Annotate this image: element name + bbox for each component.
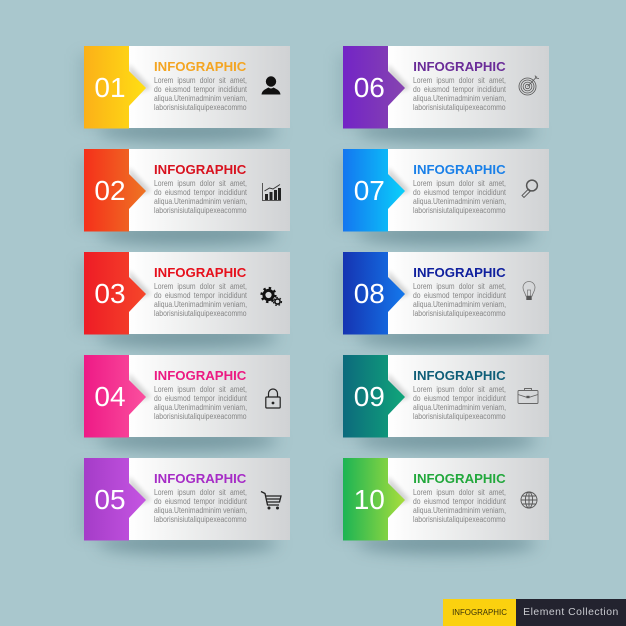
card 09 (336, 355, 549, 458)
heading 05: INFOGRAPHIC (154, 471, 246, 486)
card 07 (336, 149, 549, 252)
number tab 08 (343, 252, 410, 334)
text block 04: aliqua.Utenimadminim veniam, (154, 402, 247, 412)
text block 01 (154, 76, 247, 112)
text block 08 (413, 282, 506, 318)
number tab 03 (84, 252, 151, 334)
icon: gears (260, 286, 282, 306)
card 06 (336, 46, 549, 149)
number tab 09 (343, 355, 410, 438)
text block 04: Lorem ipsum dolor sit amet, (154, 384, 247, 394)
text block 04 (154, 384, 247, 420)
number 03: 03 (94, 278, 126, 308)
number 07: 07 (354, 174, 385, 206)
icon: target (518, 75, 539, 96)
text block 03 (154, 282, 247, 318)
number 05: 05 (94, 484, 126, 514)
number 01: 01 (94, 72, 126, 102)
text block 02: Lorem ipsum dolor sit amet, (154, 178, 247, 188)
number 09: 09 (354, 380, 385, 412)
icon: person (262, 76, 280, 94)
text block 01: laborisnisiutaliquipexeacommo (154, 102, 247, 112)
card 02 (78, 149, 290, 252)
number tab 02 (84, 149, 151, 232)
text block 09: aliqua.Utenimadminim veniam, (413, 402, 506, 412)
text block 09: Lorem ipsum dolor sit amet, (413, 384, 506, 394)
text block 09: do eiusmod tempor incididunt (413, 394, 506, 402)
text block 04: laborisnisiutaliquipexeacommo (154, 412, 247, 420)
heading 08: INFOGRAPHIC (413, 265, 506, 280)
footer label: infographic: INFOGRAPHIC (452, 608, 507, 617)
text block 07: laborisnisiutaliquipexeacommo (413, 206, 506, 214)
text block 05: aliqua.Utenimadminim veniam, (154, 506, 247, 514)
text block 03: do eiusmod tempor incididunt (154, 290, 247, 300)
text block 05: do eiusmod tempor incididunt (154, 496, 247, 506)
number 06: 06 (354, 72, 385, 102)
text block 02: laborisnisiutaliquipexeacommo (154, 206, 247, 214)
text block 02: do eiusmod tempor incididunt (154, 188, 247, 196)
text block 10: Lorem ipsum dolor sit amet, (413, 488, 506, 496)
text block 03: Lorem ipsum dolor sit amet, (154, 282, 247, 290)
card 03 (78, 252, 290, 355)
heading 04: INFOGRAPHIC (154, 368, 246, 383)
text block 10 (413, 488, 506, 524)
text block 03: aliqua.Utenimadminim veniam, (154, 300, 247, 308)
icon: shopping cart (260, 490, 282, 510)
number 04: 04 (94, 380, 126, 412)
number tab 05 (84, 458, 151, 540)
text block 07: Lorem ipsum dolor sit amet, (413, 178, 506, 188)
heading 03: INFOGRAPHIC (154, 265, 246, 280)
text block 07: do eiusmod tempor incididunt (413, 188, 506, 196)
heading 06: INFOGRAPHIC (413, 59, 506, 74)
text block 07 (413, 178, 506, 214)
text block 01: Lorem ipsum dolor sit amet, (154, 76, 247, 84)
card 01 (78, 46, 290, 149)
heading 09: INFOGRAPHIC (413, 368, 506, 383)
heading 07: INFOGRAPHIC (413, 162, 506, 177)
text block 06: laborisnisiutaliquipexeacommo (413, 102, 506, 112)
footer label: element collection (516, 599, 626, 626)
card 05 (78, 458, 290, 562)
text block 03: laborisnisiutaliquipexeacommo (154, 308, 247, 318)
number 08: 08 (354, 278, 385, 308)
number tab 07 (343, 149, 410, 232)
text block 02 (154, 178, 247, 214)
text block 10: aliqua.Utenimadminim veniam, (413, 506, 506, 514)
text block 05: Lorem ipsum dolor sit amet, (154, 488, 247, 496)
number tab 10 (343, 458, 410, 540)
text block 07: aliqua.Utenimadminim veniam, (413, 196, 506, 206)
text block 06: do eiusmod tempor incididunt (413, 84, 506, 94)
text block 01: aliqua.Utenimadminim veniam, (154, 94, 247, 102)
text block 05: laborisnisiutaliquipexeacommo (154, 514, 247, 524)
icon: globe (520, 492, 538, 508)
icon: padlock (265, 388, 281, 409)
number 02: 02 (94, 174, 126, 206)
heading 10: INFOGRAPHIC (413, 471, 506, 486)
footer label: element collection: Element Collection (523, 607, 619, 618)
text block 09: laborisnisiutaliquipexeacommo (413, 412, 506, 420)
card 10 (336, 458, 549, 562)
text block 08: laborisnisiutaliquipexeacommo (413, 308, 506, 318)
icon: light bulb (522, 281, 536, 300)
text block 04: do eiusmod tempor incididunt (154, 394, 247, 402)
text block 01: do eiusmod tempor incididunt (154, 84, 247, 94)
text block 08: do eiusmod tempor incididunt (413, 290, 506, 300)
icon: magnifier (522, 179, 538, 198)
text block 09 (413, 384, 506, 420)
card 04 (78, 355, 290, 458)
text block 08: aliqua.Utenimadminim veniam, (413, 300, 506, 308)
text block 08: Lorem ipsum dolor sit amet, (413, 282, 506, 290)
number 10: 10 (354, 484, 385, 514)
text block 10: do eiusmod tempor incididunt (413, 496, 506, 506)
footer banner (443, 599, 626, 626)
text block 10: laborisnisiutaliquipexeacommo (413, 514, 506, 524)
number tab 04 (84, 355, 151, 438)
text block 02: aliqua.Utenimadminim veniam, (154, 196, 247, 206)
heading 01: INFOGRAPHIC (154, 59, 246, 74)
number tab 01 (84, 46, 151, 128)
heading 02: INFOGRAPHIC (154, 162, 246, 177)
text block 06 (413, 76, 506, 112)
icon: briefcase (518, 388, 538, 404)
text block 06: Lorem ipsum dolor sit amet, (413, 76, 506, 84)
footer label: infographic (443, 599, 516, 626)
text block 05 (154, 488, 247, 524)
number tab 06 (343, 46, 410, 128)
text block 06: aliqua.Utenimadminim veniam, (413, 94, 506, 102)
card 08 (336, 252, 549, 355)
icon: bar chart (262, 183, 281, 201)
